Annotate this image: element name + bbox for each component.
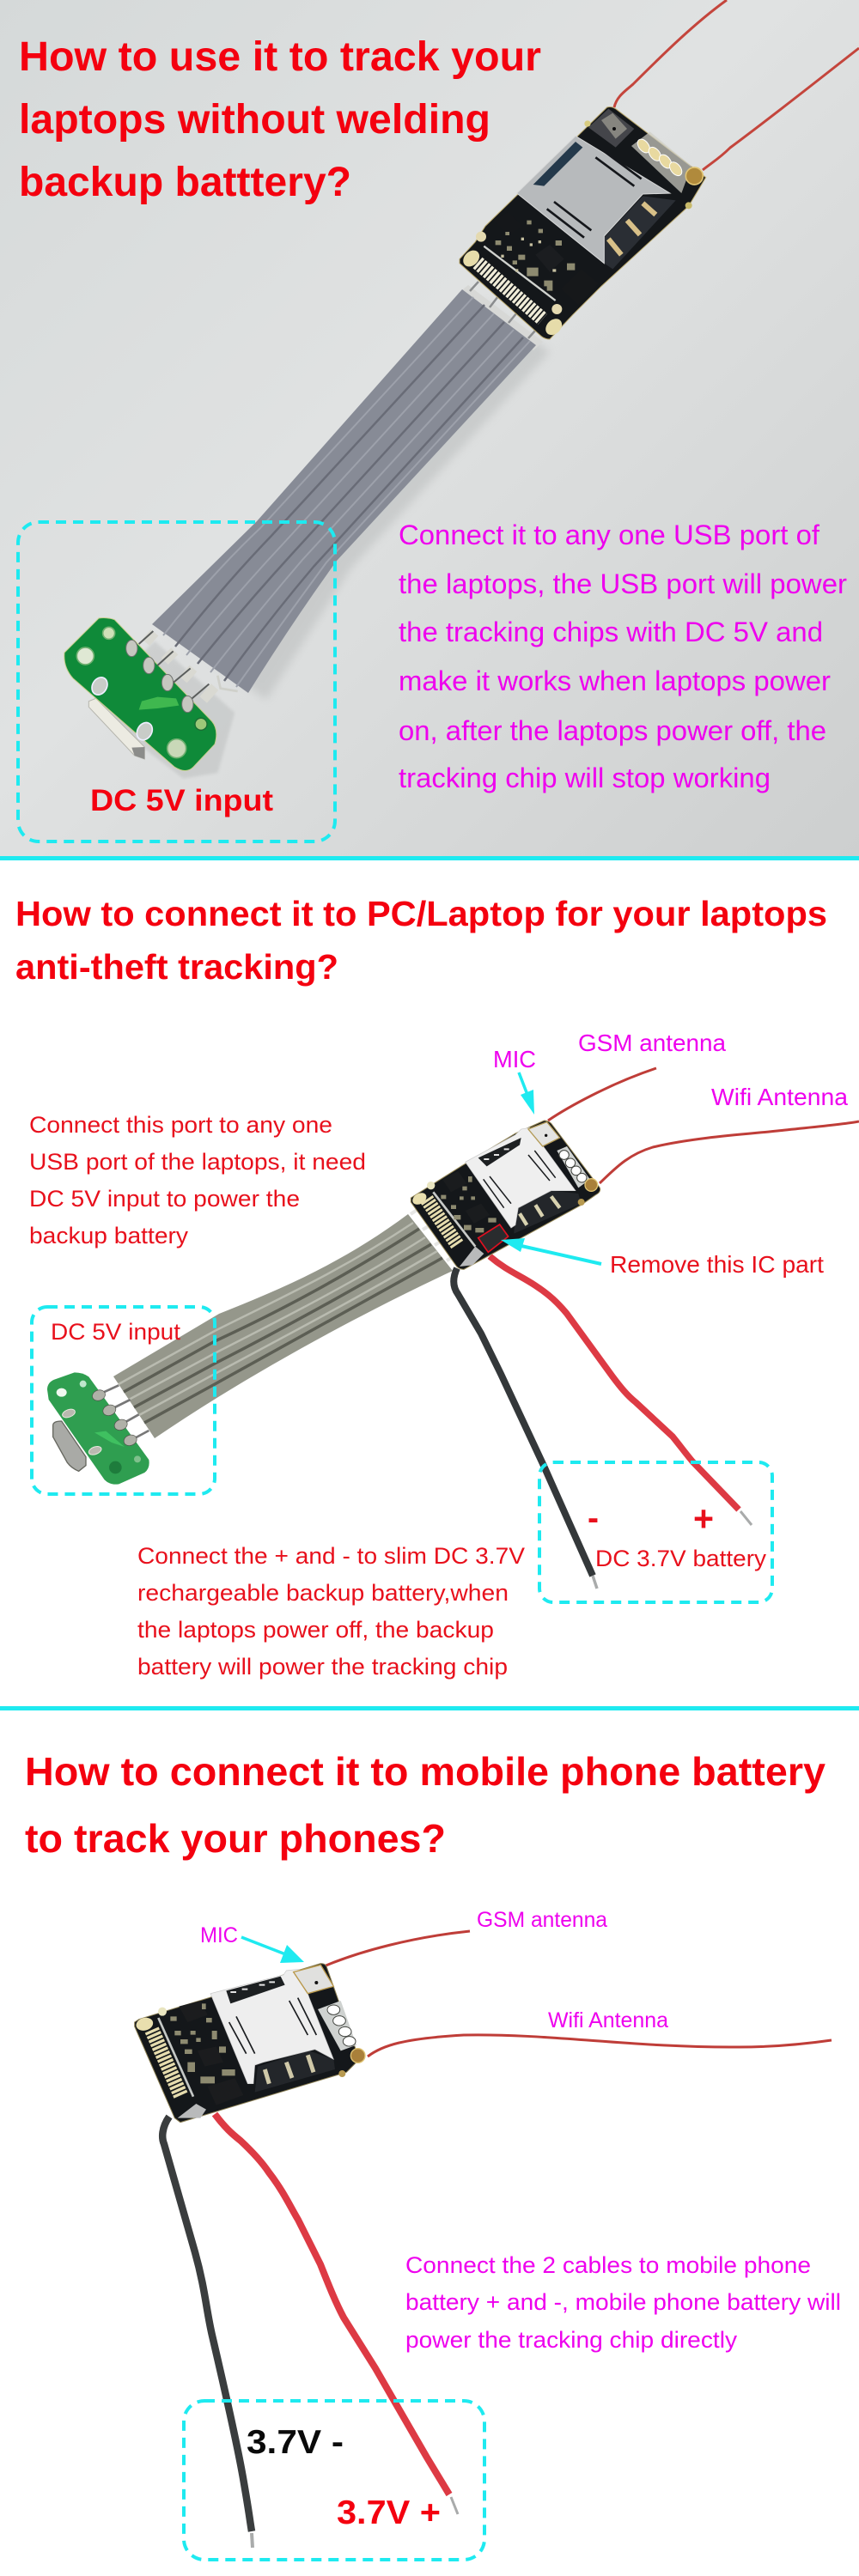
callout box: DC 3.7V battery: DC 3.7V battery <box>595 1546 767 1571</box>
callout box: DC 3.7V battery: + <box>693 1498 714 1539</box>
text block: USB power description: the tracking chips with DC 5V and <box>399 617 823 647</box>
label: remove IC part with arrow <box>501 1238 824 1278</box>
text block: battery connection note: Connect the + and - to slim DC 3.7V <box>137 1543 525 1569</box>
text block: USB power description: tracking chip will stop working <box>399 762 771 793</box>
text block: battery connection note: the laptops power off, the backup <box>137 1617 494 1643</box>
callout box: DC 5V input: DC 5V input <box>51 1319 181 1345</box>
tracking chip board <box>135 1964 365 2123</box>
label: MIC with arrow <box>200 1923 304 1963</box>
label: MIC with arrow: MIC <box>493 1046 536 1072</box>
text block: USB port note <box>29 1112 366 1249</box>
callout box: DC 5V input: DC 5V input <box>90 784 273 817</box>
callout box: 3.7V terminals: 3.7V - <box>247 2424 344 2461</box>
text block: USB power description: Connect it to any one USB port of <box>399 519 819 550</box>
divider line 2 <box>0 1706 859 1710</box>
black battery wire <box>454 1268 597 1589</box>
panel: mobile phone battery connection <box>25 1749 841 2560</box>
antenna wires <box>614 0 859 170</box>
title: connect to PC or laptop: How to connect it to PC/Laptop for your laptops <box>15 894 827 933</box>
GSM and wifi antenna wires <box>548 1068 859 1183</box>
text block: battery connection note: battery will power the tracking chip <box>137 1654 508 1680</box>
label: Wifi Antenna: Wifi Antenna <box>548 2008 668 2032</box>
text block: USB power description: on, after the laptops power off, the <box>399 715 826 746</box>
callout box: 3.7V terminals: 3.7V + <box>337 2494 441 2531</box>
black battery wire <box>162 2117 253 2548</box>
text block: USB port note: USB port of the laptops, it need <box>29 1149 366 1175</box>
GSM and wifi antenna wires <box>324 1931 832 2057</box>
title: how to use it to track laptops: backup batttery? <box>19 160 351 205</box>
text block: USB port note: backup battery <box>29 1223 189 1249</box>
callout box: DC 5V input <box>18 522 335 841</box>
label: GSM antenna: GSM antenna <box>477 1908 607 1932</box>
text block: USB power description <box>399 519 847 793</box>
text block: phone battery note: Connect the 2 cables to mobile phone <box>405 2252 811 2278</box>
text block: battery connection note <box>137 1543 525 1680</box>
panel: PC and laptop connection <box>15 894 859 1680</box>
text block: USB port note: Connect this port to any one <box>29 1112 332 1138</box>
title: how to use it to track laptops: laptops without welding <box>19 97 490 143</box>
red battery wire <box>490 1256 752 1525</box>
text block: phone battery note: power the tracking chip directly <box>405 2327 738 2353</box>
label: Wifi Antenna: Wifi Antenna <box>711 1084 848 1110</box>
label: MIC with arrow <box>493 1046 536 1115</box>
title: connect to mobile phone battery: How to connect it to mobile phone battery <box>25 1749 825 1794</box>
red battery wire <box>215 2114 458 2514</box>
green USB input board <box>64 617 238 779</box>
text block: phone battery note: battery + and -, mobile phone battery will <box>405 2289 841 2315</box>
title: connect to mobile phone battery: to track your phones? <box>25 1816 446 1861</box>
title: connect to PC or laptop: anti-theft tracking? <box>15 947 338 987</box>
green USB-C input board <box>47 1372 149 1485</box>
callout box: DC 3.7V battery <box>539 1462 772 1602</box>
text block: USB power description: make it works when laptops power <box>399 665 831 696</box>
text block: USB power description: the laptops, the USB port will power <box>399 568 847 599</box>
text block: phone battery note <box>405 2252 841 2353</box>
title: connect to mobile phone battery <box>25 1749 825 1861</box>
title: how to use it to track laptops <box>19 34 541 205</box>
title: connect to PC or laptop <box>15 894 827 987</box>
callout box: DC 5V input <box>32 1307 215 1494</box>
callout box: 3.7V terminals <box>184 2401 484 2560</box>
text block: battery connection note: rechargeable backup battery,when <box>137 1580 509 1606</box>
tracking chip board <box>411 1121 600 1269</box>
tracking chip board <box>460 106 706 339</box>
label: GSM antenna: GSM antenna <box>578 1030 726 1056</box>
label: MIC with arrow: MIC <box>200 1923 238 1947</box>
label: remove IC part with arrow: Remove this IC part <box>610 1251 824 1278</box>
ribbon cable, section two <box>113 1207 459 1438</box>
title: how to use it to track laptops: How to use it to track your <box>19 34 541 80</box>
callout box: DC 3.7V battery: - <box>588 1499 599 1537</box>
divider line 1 <box>0 856 859 860</box>
text block: USB port note: DC 5V input to power the <box>29 1186 300 1212</box>
panel: laptop usage photo <box>0 0 859 857</box>
flat ribbon cable <box>152 282 550 700</box>
